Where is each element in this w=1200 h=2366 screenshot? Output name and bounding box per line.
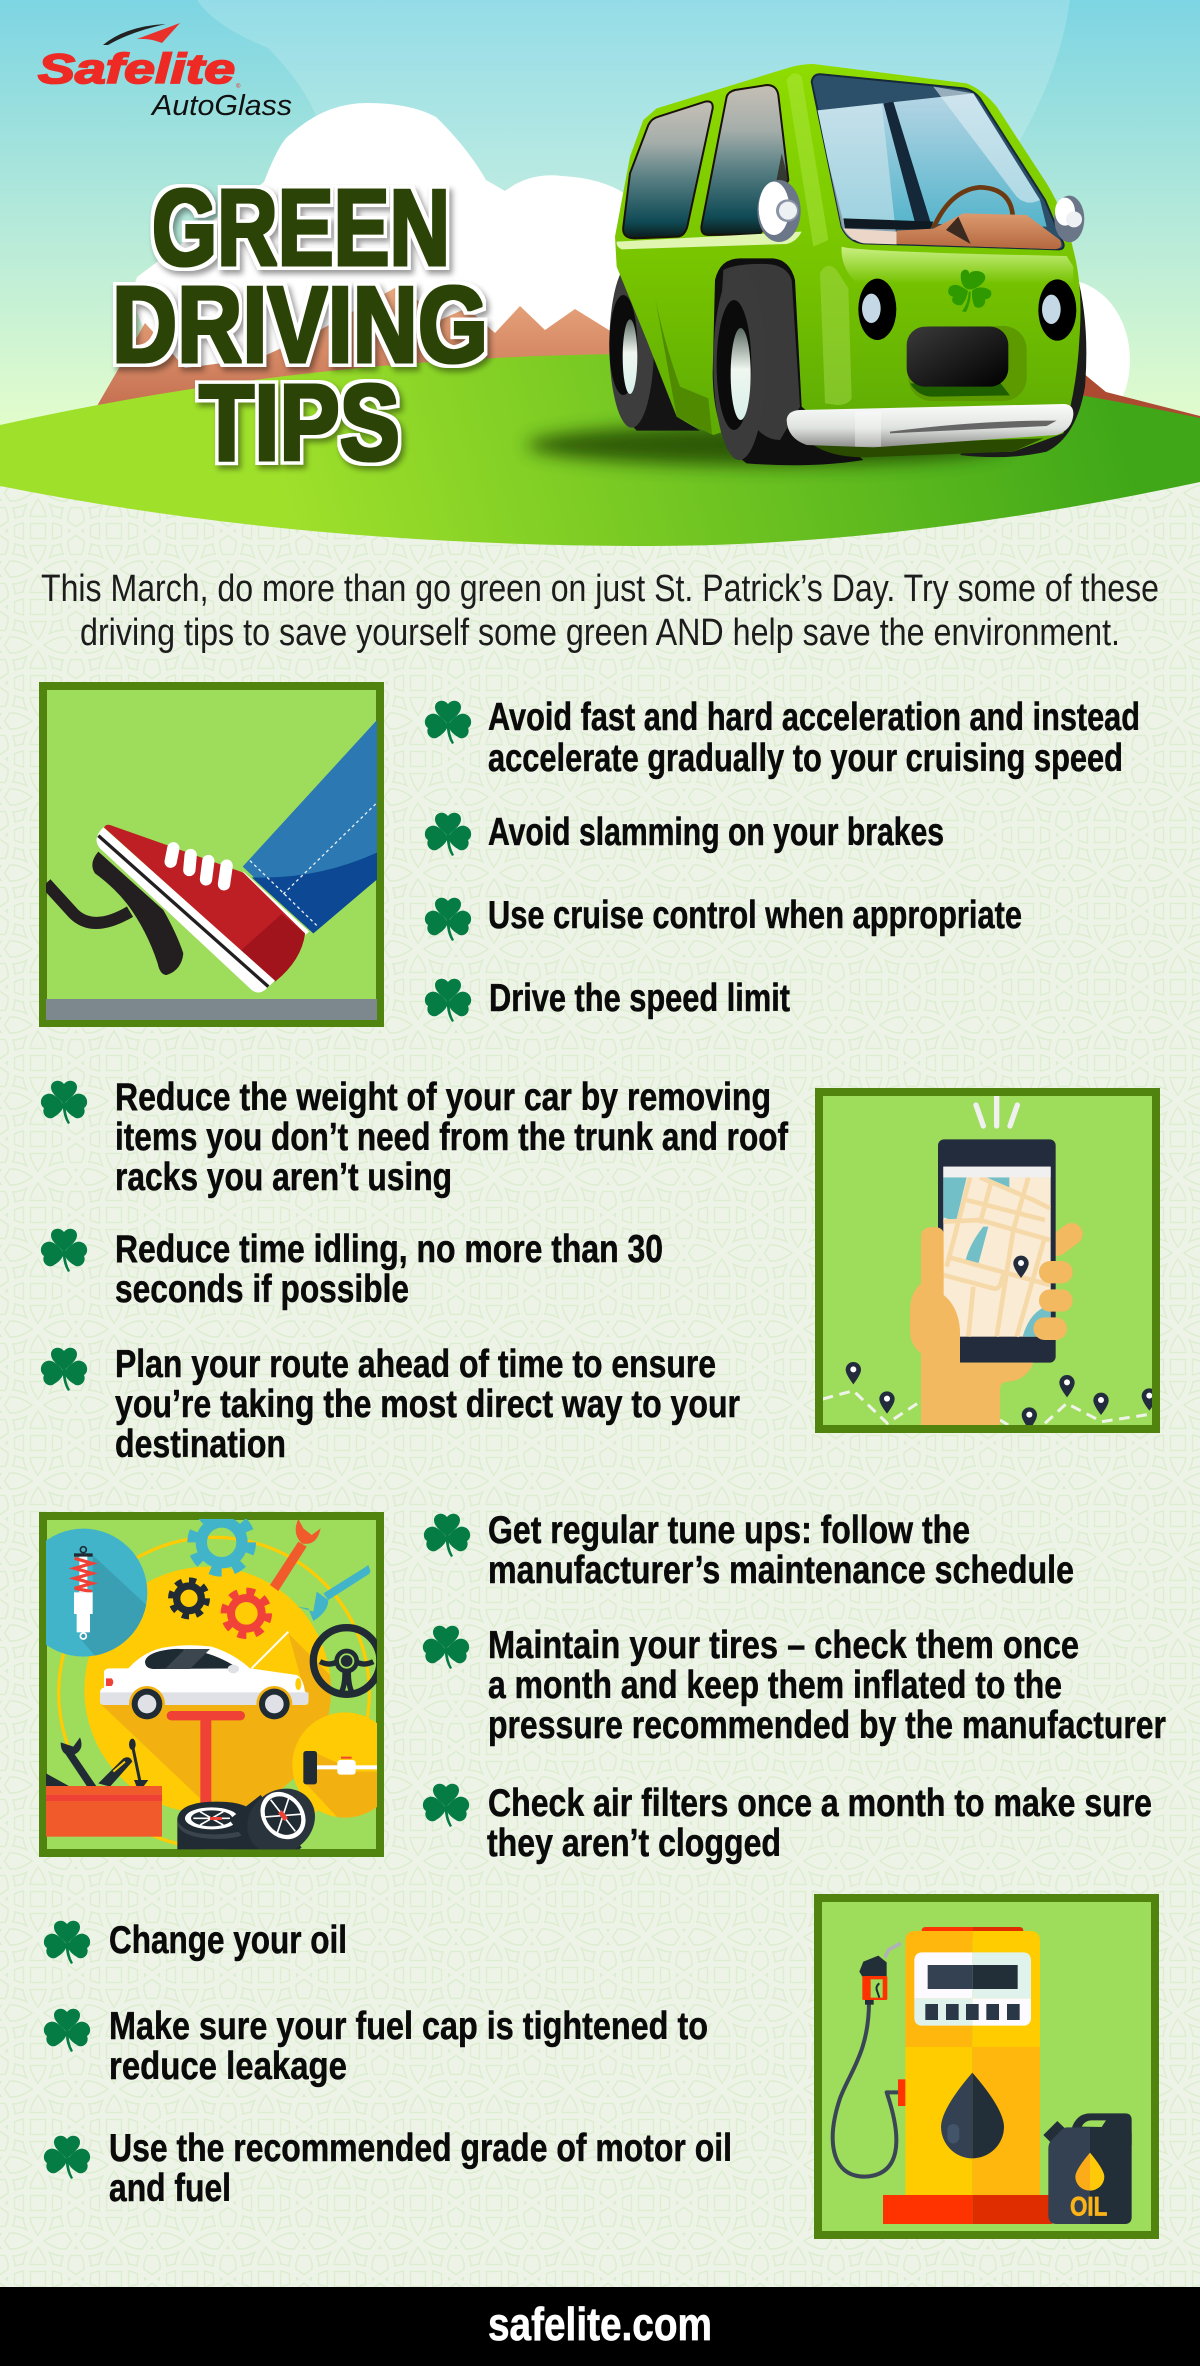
side mirrors (757, 180, 1084, 242)
shamrock bullets (423, 1514, 470, 1827)
panel: foot on pedal illustration (39, 682, 384, 1027)
intro paragraph (41, 568, 1159, 654)
yellow circle with axle (292, 1712, 377, 1818)
logo: Safelite AutoGlass: ® (236, 83, 241, 90)
ground strip (46, 999, 377, 1020)
tips group 4: and fuel (109, 2167, 231, 2210)
bumper (787, 404, 1073, 447)
tips group 2 (41, 1076, 788, 1466)
tips group 2: seconds if possible (115, 1268, 409, 1311)
tips group 2: destination (115, 1423, 286, 1466)
tips group 3: Maintain your tires – check them once (488, 1624, 1079, 1667)
laces (171, 848, 227, 884)
chassis under bumper (813, 438, 1043, 457)
tips group 2: racks you aren’t using (115, 1156, 452, 1199)
tips group 1 (425, 696, 1140, 1022)
tips group 2: you’re taking the most direct way to your (115, 1383, 740, 1426)
pedal (46, 883, 130, 923)
panel: fuel pump illustration (814, 1894, 1159, 2239)
tips group 1: Drive the speed limit (489, 977, 790, 1020)
headlights (858, 279, 1076, 341)
steering wheel (313, 1628, 380, 1694)
title: Green Driving Tips: TIPS (199, 362, 400, 484)
clouds (134, 103, 720, 400)
shamrock bullets (425, 701, 471, 1022)
black gear (171, 1580, 207, 1617)
panel: phone map illustration (815, 1088, 1160, 1433)
oil can: OIL (1070, 2191, 1107, 2221)
map pins (846, 1256, 1157, 1430)
logo: Safelite AutoGlass: AutoGlass (150, 90, 292, 122)
trouser leg (243, 720, 377, 933)
green hill (0, 354, 1200, 546)
title: Green Driving Tips: GREEN (152, 167, 450, 289)
tips group 2: Plan your route ahead of time to ensure (115, 1343, 716, 1386)
blue gear (192, 1512, 252, 1572)
tips group 3 (423, 1509, 1166, 1865)
display (914, 1952, 1031, 2026)
wheel arch and front wheel (713, 258, 863, 465)
red gear (224, 1591, 269, 1636)
door highlight (820, 266, 852, 405)
pump top cap (922, 1927, 972, 1938)
tips group 3: Get regular tune ups: follow the (488, 1509, 970, 1552)
shamrock bullets (44, 1921, 90, 2179)
fuel drop (941, 2073, 1004, 2158)
hero scene background (0, 0, 1200, 546)
toolbox with tools (46, 1737, 162, 1837)
body crease (655, 297, 712, 434)
side window front (701, 85, 788, 235)
tips group 4: Make sure your fuel cap is tightened to (109, 2005, 708, 2048)
hand (910, 1227, 1033, 1425)
orange wrench (270, 1519, 321, 1591)
grille (907, 326, 1027, 401)
mountains (90, 285, 640, 420)
title: Green Driving Tips (112, 167, 488, 484)
logo: Safelite AutoGlass: Safelite (38, 45, 235, 92)
nozzle (859, 1942, 902, 2005)
tips group 3: they aren’t clogged (487, 1822, 781, 1865)
tips group 1: Use cruise control when appropriate (488, 894, 1022, 937)
shamrock bullets (41, 1081, 87, 1391)
light sky blob (197, 0, 1070, 300)
oil can (1043, 2113, 1132, 2224)
tips group 4: Use the recommended grade of motor oil (109, 2127, 732, 2170)
outer ring (59, 1537, 369, 1848)
hose (833, 2002, 898, 2177)
big yellow circle (84, 1567, 331, 1813)
lift (167, 1711, 245, 1803)
four-leaf clover (948, 270, 991, 312)
windshield (812, 74, 1064, 249)
index finger behind phone (1057, 1234, 1072, 1245)
footer bar: safelite.com (488, 2298, 712, 2350)
map screen (943, 1167, 1051, 1337)
blue circle with shock absorber (46, 1528, 148, 1657)
green car illustration (527, 64, 1086, 466)
title: Green Driving Tips: DRIVING (112, 264, 488, 386)
tips group 2: Reduce the weight of your car by removing (115, 1076, 771, 1119)
rear wheel (609, 262, 700, 431)
signal rays (976, 1096, 1017, 1126)
tips group 4: Change your oil (109, 1919, 347, 1962)
tips group 1: Avoid slamming on your brakes (488, 811, 944, 854)
panel: car maintenance illustration (39, 1512, 384, 1857)
phone (938, 1139, 1056, 1363)
tips group 2: Reduce time idling, no more than 30 (115, 1228, 663, 1271)
route dashes (823, 1391, 1152, 1425)
pump base (883, 2195, 972, 2224)
white car (100, 1632, 308, 1722)
tips group 4 (44, 1919, 732, 2210)
blue wrench (297, 1565, 371, 1621)
tyres (177, 1788, 315, 1850)
pillar highlight (787, 73, 828, 247)
car shadow (527, 424, 1007, 466)
side window rear (623, 101, 713, 238)
logo: Safelite AutoGlass (38, 23, 292, 122)
tips group 4: reduce leakage (109, 2045, 347, 2088)
pump body (905, 1931, 972, 2047)
sky (0, 0, 1200, 440)
far tyre (960, 273, 1086, 457)
car body (615, 64, 1080, 457)
tips group 3: a month and keep them inflated to the (488, 1664, 1062, 1707)
window sill highlight (617, 232, 802, 249)
fingers (1033, 1261, 1073, 1340)
tips group 2: items you don’t need from the trunk and roof (115, 1116, 788, 1159)
tips group 3: manufacturer’s maintenance schedule (488, 1549, 1074, 1592)
shoe (239, 872, 309, 935)
hood highlight (842, 247, 1073, 283)
footer bar (0, 2287, 1200, 2366)
